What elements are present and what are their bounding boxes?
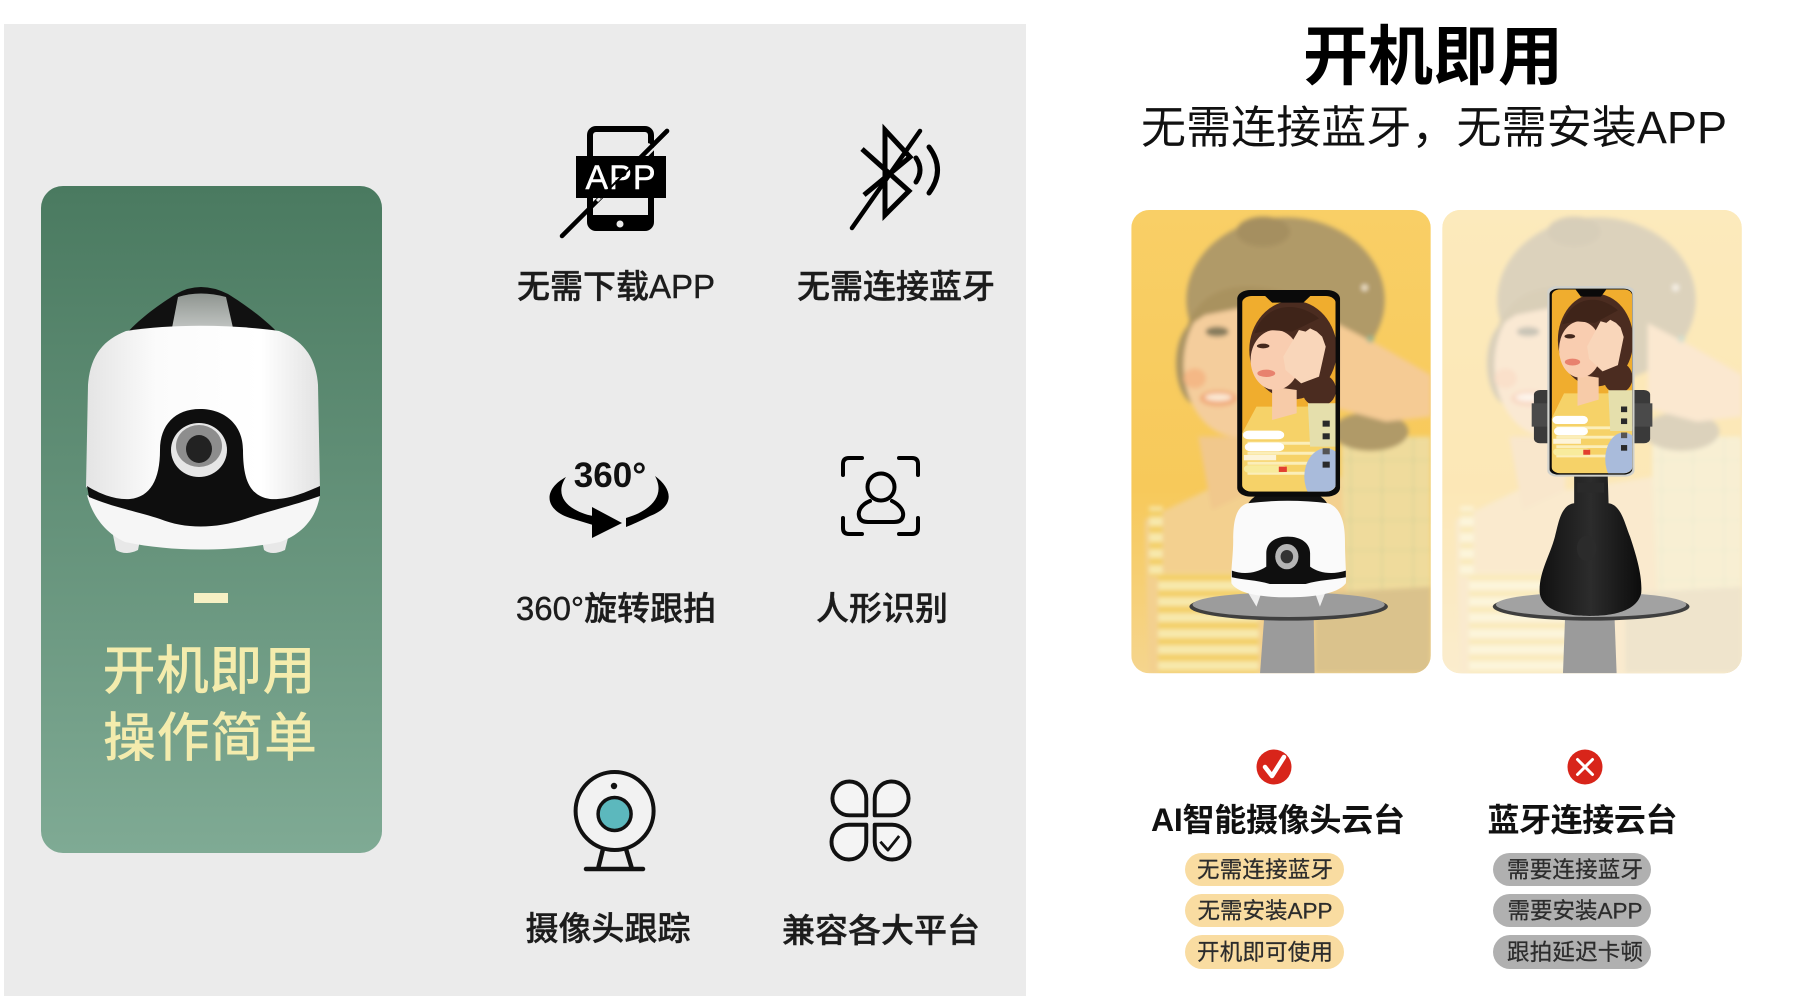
icon: 360 rotation arrow: 360°: [574, 456, 646, 495]
pill: needs app: 需要安装APP: [1507, 898, 1643, 924]
heading: product card: 开机即用: [102, 642, 316, 701]
panel: green product card: [41, 186, 382, 853]
feature: human recognition: [816, 458, 948, 627]
icon: crossed-out bluetooth: [852, 130, 938, 228]
photo: bluetooth gimbal: [1442, 210, 1742, 673]
pill: ready to use: [1185, 935, 1344, 969]
label: 人形识别: [816, 590, 948, 627]
label: 兼容各大平台: [782, 912, 980, 949]
label: 摄像头跟踪: [526, 910, 690, 947]
label: 360°旋转跟拍: [516, 590, 716, 627]
heading: 蓝牙连接云台: [1488, 802, 1678, 838]
accent dash: [194, 593, 228, 603]
pill: no app: 无需安装APP: [1197, 898, 1333, 924]
label: 无需连接蓝牙: [797, 268, 995, 305]
icon: crossed-out app phone: APP: [585, 159, 657, 197]
table stand: [1189, 592, 1388, 673]
feature: no bluetooth: [797, 130, 995, 305]
icon: person in viewfinder: [843, 458, 918, 534]
pill: needs bluetooth: [1493, 853, 1651, 886]
phone on gimbal: [1237, 290, 1347, 505]
heading: AI智能摄像头云台: [1151, 802, 1405, 838]
feature: 360 rotation: [516, 456, 716, 627]
icon: clover with check: [831, 781, 910, 860]
pill: no bluetooth: 无需连接蓝牙: [1197, 858, 1333, 882]
pill: needs app: [1493, 894, 1651, 927]
pill: ready to use: 开机即可使用: [1197, 940, 1333, 965]
icon: red cross: [1568, 750, 1602, 784]
feature: no app download: [517, 129, 715, 305]
heading: product card: 操作简单: [103, 709, 317, 768]
icon: webcam: [576, 772, 654, 869]
comparison column: AI gimbal: [1151, 750, 1405, 969]
black gimbal: [1540, 475, 1641, 616]
feature: camera tracking: [526, 772, 690, 947]
icon: crossed-out app phone: [562, 129, 667, 236]
product: white tracking robot: [86, 287, 320, 553]
heading: product card: [102, 642, 317, 768]
pill: no bluetooth: [1185, 853, 1344, 886]
title: 开机即用: [1303, 20, 1563, 93]
photo: AI camera gimbal: [1131, 210, 1431, 673]
pill: no app: [1185, 894, 1344, 927]
pill: tracking lag: [1493, 935, 1651, 969]
table stand: [1493, 592, 1689, 673]
white gimbal: [1231, 485, 1346, 607]
feature: platform compatibility: [782, 781, 980, 949]
pill: tracking lag: 跟拍延迟卡顿: [1507, 940, 1643, 965]
pill: needs bluetooth: 需要连接蓝牙: [1507, 858, 1643, 882]
comparison column: bluetooth gimbal: [1488, 750, 1678, 969]
phone with clamp: [1532, 286, 1652, 486]
label: 无需下载APP: [517, 268, 715, 305]
icon: 360 rotation arrow: [550, 456, 669, 538]
subtitle: 无需连接蓝牙，无需安装APP: [1141, 102, 1727, 153]
panel: grey feature panel: [4, 24, 1026, 996]
icon: red check: [1256, 750, 1292, 784]
